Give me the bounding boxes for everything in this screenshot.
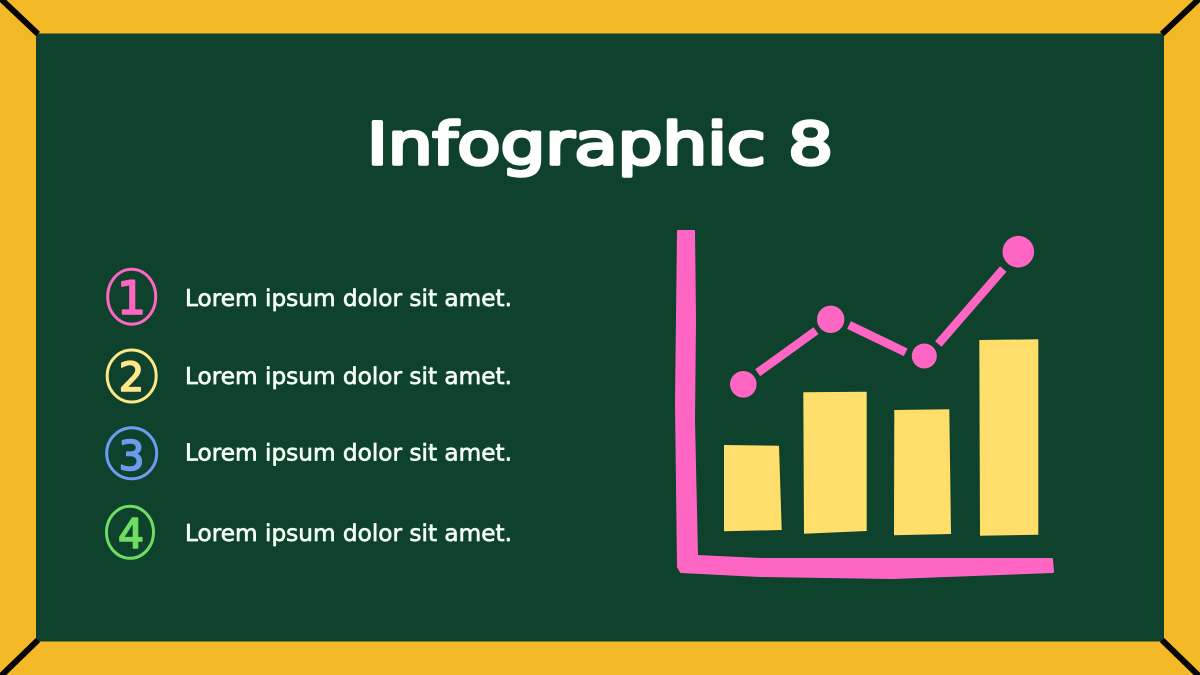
chart: hand-drawn bar and line chart (676, 231, 1053, 578)
list: numbered items (106, 269, 512, 558)
icon: green circled number 4: 4 (118, 510, 144, 558)
text: item 2 label: Lorem ipsum dolor sit amet. (185, 364, 512, 390)
list item 1 (108, 269, 512, 325)
list item 4 (106, 506, 512, 558)
icon: green circled number 4 (106, 506, 154, 558)
icon: blue circled number 3: 3 (118, 432, 145, 480)
chart axes (676, 231, 1053, 578)
list item 3 (107, 428, 512, 480)
list item 2 (107, 350, 512, 402)
text: item 4 label: Lorem ipsum dolor sit amet. (185, 521, 512, 547)
text: item 3 label: Lorem ipsum dolor sit amet. (185, 440, 512, 466)
title: Infographic 8 (367, 110, 833, 178)
icon: yellow circled number 2: 2 (119, 355, 144, 401)
chart trend line (758, 269, 1003, 373)
icon: yellow circled number 2 (107, 350, 156, 402)
chart bars (724, 339, 1038, 536)
chart trend points (730, 236, 1034, 398)
text: item 1 label: Lorem ipsum dolor sit amet. (185, 286, 512, 312)
icon: pink circled number 1: 1 (117, 271, 146, 325)
icon: pink circled number 1 (108, 269, 156, 325)
icon: blue circled number 3 (107, 428, 157, 480)
